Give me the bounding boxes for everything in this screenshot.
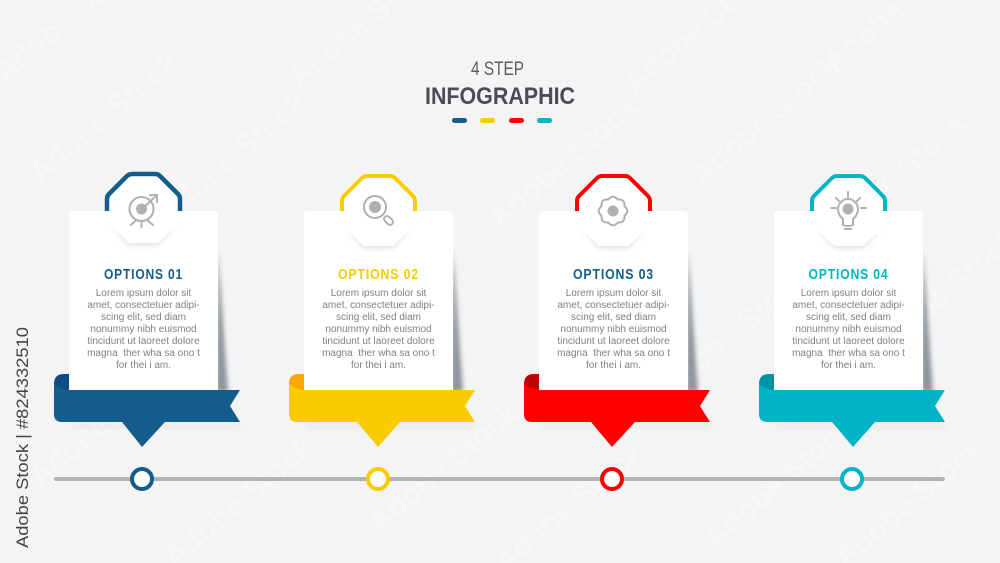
- ribbon 03: [524, 374, 710, 447]
- text block 02: [322, 288, 435, 371]
- text block 02: scing elit, sed diam: [336, 312, 421, 323]
- text block 02: magna ther wha sa ono t: [322, 348, 435, 359]
- text block 04: nonummy nibh euismod: [795, 324, 902, 335]
- heading: options 02: OPTIONS 02: [338, 267, 419, 283]
- text block 04: Lorem ipsum dolor sit: [801, 288, 897, 299]
- stock watermarks: Adobe Stock: [685, 49, 847, 192]
- card 04: [774, 211, 933, 394]
- icon: magnifier: [364, 196, 394, 226]
- text block 03: nonummy nibh euismod: [560, 324, 667, 335]
- text block 02: for thei i am.: [351, 360, 406, 371]
- vertical stock credit: Adobe Stock | #824332510: [13, 327, 32, 548]
- text block 02: amet, consectetuer adipi-: [322, 300, 435, 311]
- card 02: [304, 211, 463, 394]
- stock watermarks: Adobe Stock: [23, 46, 185, 189]
- icon: gear: [599, 197, 627, 225]
- heading: options 04: OPTIONS 04: [808, 267, 888, 283]
- text block 01: scing elit, sed diam: [101, 312, 186, 323]
- text block 04: amet, consectetuer adipi-: [792, 300, 905, 311]
- badge 02: [342, 176, 415, 248]
- stock watermarks: Adobe Stock: [151, 86, 313, 229]
- panel: options 01: [54, 174, 240, 489]
- text block 03: amet, consectetuer adipi-: [557, 300, 670, 311]
- icon: target with arrow: [130, 195, 157, 227]
- text block 03: for thei i am.: [586, 360, 641, 371]
- ribbon 01: [54, 374, 240, 447]
- timeline marker 03: [602, 469, 622, 489]
- text block 03: tincidunt ut laoreet dolore: [557, 336, 670, 347]
- ribbon 02: [289, 374, 475, 447]
- panel: options 02: [289, 176, 475, 489]
- stock watermarks: Adobe Stock: [653, 261, 815, 404]
- text block 02: Lorem ipsum dolor sit: [331, 288, 427, 299]
- timeline line: [54, 477, 945, 481]
- badge 03: [577, 176, 650, 248]
- stock watermarks: Adobe Stock: [813, 106, 975, 249]
- card 03: [539, 211, 698, 394]
- timeline marker 01: [132, 469, 152, 489]
- text block 04: scing elit, sed diam: [806, 312, 891, 323]
- heading: options 01: OPTIONS 01: [104, 267, 183, 283]
- icon: light bulb: [831, 192, 866, 229]
- stock watermarks: Adobe Stock: [483, 91, 645, 234]
- text block 04: tincidunt ut laoreet dolore: [792, 336, 905, 347]
- text block 04: for thei i am.: [821, 360, 876, 371]
- colour key dashes: [452, 118, 552, 123]
- timeline marker 02: [368, 469, 388, 489]
- badge 01: [107, 174, 180, 245]
- heading: options 03: OPTIONS 03: [573, 267, 654, 283]
- panel: options 03: [524, 176, 710, 489]
- subtitle: 4 step: 4 STEP: [471, 59, 524, 80]
- title: [425, 59, 575, 123]
- text block 01: tincidunt ut laoreet dolore: [87, 336, 200, 347]
- text block 02: tincidunt ut laoreet dolore: [322, 336, 435, 347]
- text block 01: nonummy nibh euismod: [90, 324, 197, 335]
- stock watermarks: Adobe Stock: [23, 351, 185, 494]
- text block 01: amet, consectetuer adipi-: [87, 300, 200, 311]
- text block 02: nonummy nibh euismod: [325, 324, 432, 335]
- text block 03: scing elit, sed diam: [571, 312, 656, 323]
- text block 01: Lorem ipsum dolor sit: [96, 288, 192, 299]
- timeline marker 04: [842, 469, 862, 489]
- text block 01: for thei i am.: [116, 360, 171, 371]
- text block 04: [792, 288, 905, 371]
- panel: options 04: [759, 176, 945, 489]
- text block 01: magna ther wha sa ono t: [87, 348, 200, 359]
- text block 03: magna ther wha sa ono t: [557, 348, 670, 359]
- stock watermarks: Adobe Stock: [698, 411, 860, 554]
- card 01: [69, 211, 228, 394]
- text block 03: Lorem ipsum dolor sit: [566, 288, 662, 299]
- ribbon 04: [759, 374, 945, 447]
- text block 03: [557, 288, 670, 371]
- stock watermarks: Adobe Stock: [363, 396, 525, 539]
- heading: infographic: INFOGRAPHIC: [425, 83, 575, 110]
- text block 04: magna ther wha sa ono t: [792, 348, 905, 359]
- badge 04: [812, 176, 885, 248]
- text block 01: [87, 288, 200, 371]
